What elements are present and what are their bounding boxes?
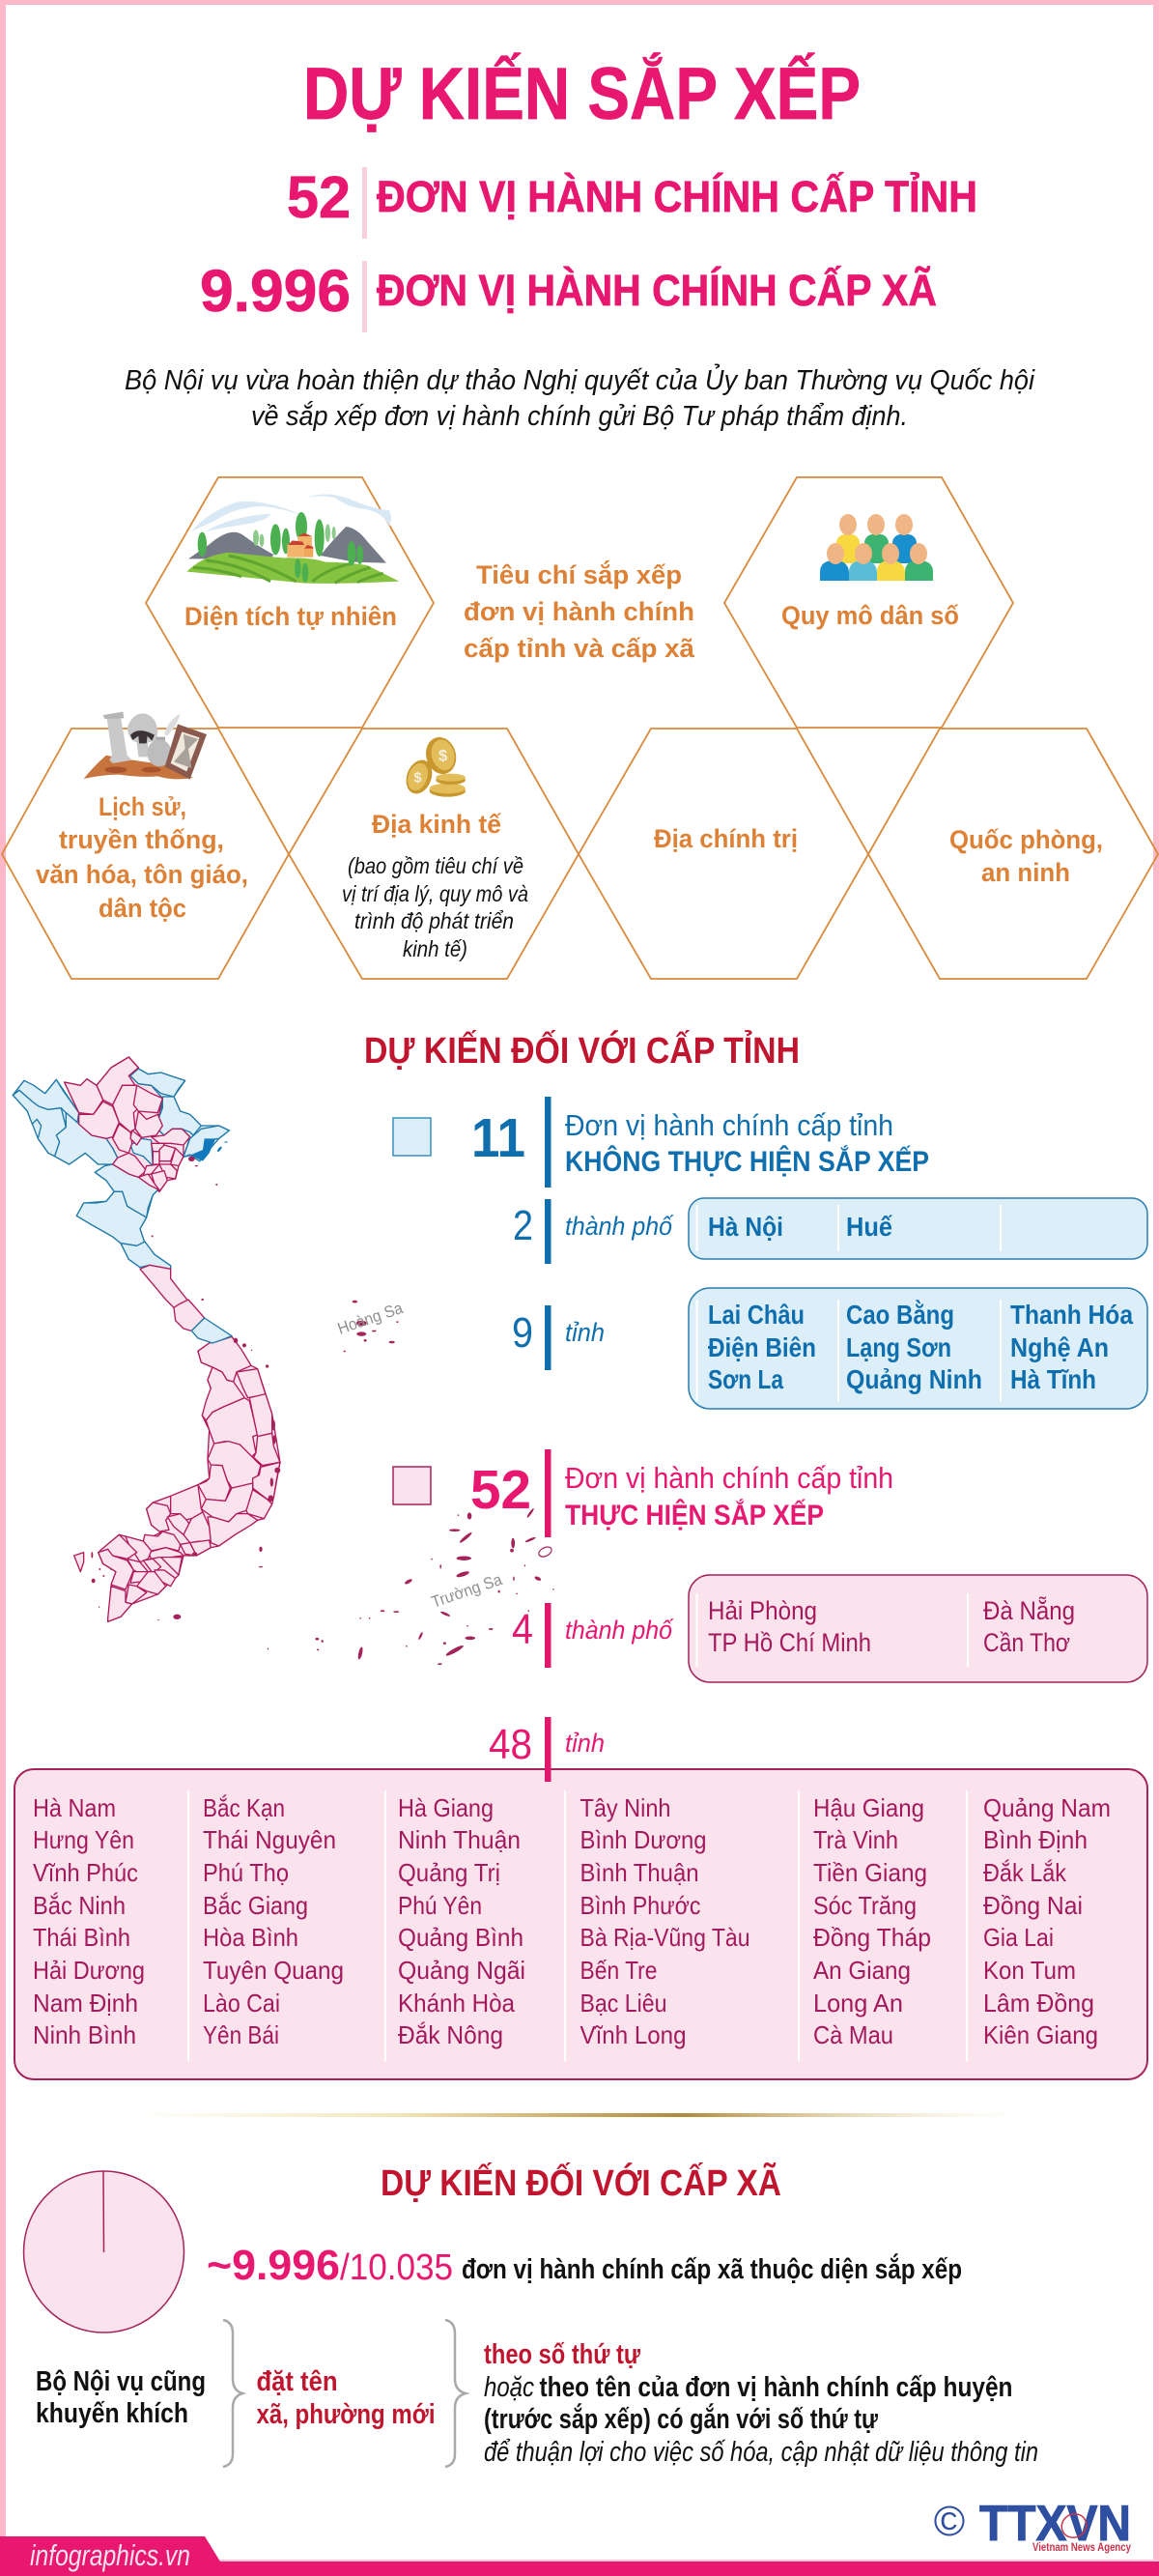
column 3: Hà Giang bbox=[398, 1793, 494, 1822]
column 2: Thái Nguyên bbox=[203, 1825, 336, 1854]
label: Trường Sa: Trường Sa bbox=[429, 1570, 505, 1612]
bracket 2 bbox=[445, 2320, 466, 2467]
column 5: Long An bbox=[813, 1989, 903, 2018]
note: geo-economics detail: vị trí địa lý, quy mô và bbox=[342, 881, 528, 906]
stat: 52 provinces rearranged: Đơn vị hành chính cấp tỉnh bbox=[565, 1461, 893, 1495]
column 6: Đồng Nai bbox=[983, 1891, 1083, 1920]
label: natural area: Diện tích tự nhiên bbox=[184, 602, 397, 631]
pie chart: 9.996 of 10.035 bbox=[23, 2171, 184, 2333]
column 3: Quảng Trị bbox=[398, 1858, 500, 1887]
headline stat: 52 provinces: 52 bbox=[287, 164, 351, 230]
column 2: Hòa Bình bbox=[203, 1923, 298, 1952]
stat: 52 provinces rearranged: THỰC HIỆN SẮP XẾP bbox=[565, 1499, 824, 1531]
islands: Trường Sa bbox=[268, 1507, 554, 1665]
note: geo-economics detail bbox=[342, 853, 528, 961]
map of Vietnam: south bbox=[74, 1299, 280, 1621]
column 2 bbox=[203, 1793, 344, 2049]
stat: 11 provinces not rearranged: 11 bbox=[471, 1107, 525, 1169]
label: defence and security: an ninh bbox=[981, 858, 1070, 887]
column 2: Yên Bái bbox=[203, 2020, 279, 2049]
column 6: Lâm Đồng bbox=[983, 1989, 1094, 2018]
islands: Hoàng Sa bbox=[344, 1301, 399, 1352]
panel: blue provinces bbox=[689, 1288, 1147, 1409]
column 3: Ninh Thuận bbox=[398, 1825, 521, 1854]
panel: blue provinces: Nghệ An bbox=[1010, 1332, 1109, 1362]
text: naming options: theo số thứ tự bbox=[484, 2339, 640, 2370]
column 5: Trà Vinh bbox=[813, 1825, 898, 1854]
stat: 52 provinces rearranged bbox=[470, 1449, 893, 1537]
label: geo-economics: Địa kinh tế bbox=[372, 810, 502, 839]
panel: blue provinces: Cao Bằng bbox=[846, 1300, 954, 1330]
panel: blue cities bbox=[689, 1198, 1147, 1259]
panel: pink cities: Hải Phòng bbox=[708, 1596, 817, 1625]
panel: blue provinces: Lai Châu bbox=[708, 1300, 805, 1330]
text: ministry encourages bbox=[36, 2366, 206, 2429]
column 1: Nam Định bbox=[33, 1989, 138, 2018]
stat: commune count: đơn vị hành chính cấp xã thuộc diện sắp xếp bbox=[462, 2252, 962, 2285]
footer bar bbox=[0, 2536, 1159, 2576]
column 2: Phú Thọ bbox=[203, 1858, 289, 1887]
column 2: Bắc Kạn bbox=[203, 1793, 285, 1822]
headline stat: 52 provinces: ĐƠN VỊ HÀNH CHÍNH CẤP TỈNH bbox=[377, 172, 977, 221]
column 6: Đắk Lắk bbox=[983, 1858, 1067, 1887]
stat: 9 provinces: 9 bbox=[512, 1309, 533, 1357]
stat: 52 provinces rearranged: 52 bbox=[470, 1459, 531, 1521]
center heading: criteria: đơn vị hành chính bbox=[464, 597, 694, 626]
intro text bbox=[125, 362, 1035, 432]
label: history and culture: Lịch sử, bbox=[99, 792, 186, 821]
note: geo-economics detail: kinh tế) bbox=[403, 936, 467, 961]
panel: blue cities: Huế bbox=[846, 1212, 892, 1242]
column 4: Vĩnh Long bbox=[580, 2020, 686, 2049]
text: name new communes: xã, phường mới bbox=[257, 2399, 435, 2430]
column 5: An Giang bbox=[813, 1956, 911, 1985]
icon: people bbox=[820, 514, 933, 581]
column 6 bbox=[983, 1793, 1111, 2049]
column 5: Hậu Giang bbox=[813, 1793, 924, 1822]
map of Vietnam: north bbox=[13, 1057, 229, 1307]
label: population size: Quy mô dân số bbox=[781, 601, 959, 630]
panel: blue provinces: Thanh Hóa bbox=[1010, 1300, 1133, 1330]
stat: 11 provinces not rearranged: KHÔNG THỰC HIỆN SẮP XẾP bbox=[565, 1145, 929, 1178]
text: ministry encourages: khuyến khích bbox=[36, 2398, 188, 2429]
panel: blue provinces: Hà Tĩnh bbox=[1010, 1364, 1096, 1394]
stat: 2 cities: 2 bbox=[513, 1202, 533, 1249]
column 6: Bình Định bbox=[983, 1825, 1088, 1854]
column 1: Thái Bình bbox=[33, 1923, 130, 1952]
column 5 bbox=[813, 1793, 931, 2049]
stat: commune count: /10.035 bbox=[340, 2247, 453, 2288]
column 3: Quảng Bình bbox=[398, 1923, 523, 1952]
section heading: commune level: DỰ KIẾN ĐỐI VỚI CẤP XÃ bbox=[381, 2161, 781, 2204]
logo: TTXVN: TTXVN bbox=[979, 2496, 1131, 2552]
logo: TTXVN: © bbox=[934, 2498, 965, 2545]
center heading: criteria: Tiêu chí sắp xếp bbox=[476, 559, 682, 589]
column 1: Hưng Yên bbox=[33, 1825, 134, 1854]
panel: blue cities: Hà Nội bbox=[708, 1212, 783, 1242]
column 3: Quảng Ngãi bbox=[398, 1956, 525, 1985]
text: naming options: theo tên của đơn vị hành chính cấp huyện bbox=[539, 2372, 1012, 2403]
column 1: Vĩnh Phúc bbox=[33, 1858, 138, 1887]
legend: blue square bbox=[393, 1118, 431, 1156]
stat: 48 provinces: 48 bbox=[489, 1721, 532, 1768]
text: name new communes bbox=[257, 2366, 435, 2430]
panel: pink cities: TP Hồ Chí Minh bbox=[708, 1628, 871, 1657]
title: DỰ KIẾN SẮP XẾP bbox=[303, 52, 861, 135]
legend: pink square bbox=[393, 1467, 431, 1504]
label: history and culture bbox=[36, 792, 248, 923]
center heading: criteria: cấp tỉnh và cấp xã bbox=[464, 634, 695, 663]
stat: 2 cities: thành phố bbox=[565, 1212, 674, 1241]
bracket 1 bbox=[223, 2320, 242, 2467]
stat: 9 provinces bbox=[512, 1305, 605, 1370]
icon: coins bbox=[402, 733, 466, 797]
column 4: Bình Phước bbox=[580, 1891, 701, 1920]
intro text: về sắp xếp đơn vị hành chính gửi Bộ Tư pháp thẩm định. bbox=[251, 400, 908, 432]
panel: pink cities: Cần Thơ bbox=[983, 1628, 1070, 1657]
panel: pink cities bbox=[689, 1575, 1147, 1682]
column 6: Kiên Giang bbox=[983, 2020, 1098, 2049]
icon: history artefacts bbox=[84, 712, 207, 780]
stat: 2 cities bbox=[513, 1199, 674, 1264]
logo: TTXVN: Vietnam News Agency bbox=[1032, 2540, 1131, 2554]
stat: 11 provinces not rearranged bbox=[471, 1097, 929, 1188]
text: naming options: (trước sắp xếp) có gắn với số thứ tự bbox=[484, 2402, 878, 2435]
column 1: Hà Nam bbox=[33, 1793, 116, 1822]
column 4: Bạc Liêu bbox=[580, 1989, 666, 2018]
panel: blue provinces: Sơn La bbox=[708, 1364, 783, 1394]
icon: landscape bbox=[186, 495, 399, 584]
stat: 11 provinces not rearranged: Đơn vị hành chính cấp tỉnh bbox=[565, 1108, 893, 1142]
note: geo-economics detail: trình độ phát triển bbox=[354, 908, 514, 933]
text: naming options: hoặc bbox=[484, 2372, 534, 2403]
column 2: Bắc Giang bbox=[203, 1891, 308, 1920]
stat: 4 cities: thành phố bbox=[565, 1616, 674, 1645]
column 3: Đắk Nông bbox=[398, 2020, 503, 2049]
label: Hoàng Sa: Hoàng Sa bbox=[335, 1299, 406, 1338]
column 2: Lào Cai bbox=[203, 1989, 280, 2018]
column 5: Sóc Trăng bbox=[813, 1891, 917, 1920]
headline stat: 9.996 communes: ĐƠN VỊ HÀNH CHÍNH CẤP XÃ bbox=[377, 266, 937, 315]
panel: blue provinces: Điện Biên bbox=[708, 1332, 816, 1362]
column 6: Gia Lai bbox=[983, 1923, 1054, 1952]
headline stat: 52 provinces bbox=[287, 164, 977, 239]
column 6: Kon Tum bbox=[983, 1956, 1076, 1985]
column 1: Hải Dương bbox=[33, 1956, 145, 1985]
text: name new communes: đặt tên bbox=[257, 2366, 338, 2397]
headline stat: 9.996 communes bbox=[200, 258, 937, 332]
center heading: criteria bbox=[464, 559, 695, 663]
label: defence and security: Quốc phòng, bbox=[949, 825, 1103, 854]
stat: commune count bbox=[207, 2242, 962, 2289]
column 6: Quảng Nam bbox=[983, 1793, 1111, 1822]
column 3 bbox=[398, 1793, 525, 2049]
stat: 48 provinces bbox=[489, 1717, 605, 1782]
column 4: Bình Dương bbox=[580, 1825, 707, 1854]
stat: 48 provinces: tỉnh bbox=[565, 1729, 605, 1758]
criteria hexagon grid bbox=[2, 477, 1158, 979]
column 3: Khánh Hòa bbox=[398, 1989, 515, 2018]
icon: coins: $ bbox=[438, 746, 448, 764]
panel: pink cities: Đà Nẵng bbox=[983, 1595, 1075, 1625]
column 1: Bắc Ninh bbox=[33, 1891, 126, 1920]
column 5: Cà Mau bbox=[813, 2020, 893, 2049]
column 4 bbox=[580, 1793, 749, 2049]
stat: 9 provinces: tỉnh bbox=[565, 1318, 605, 1347]
label: history and culture: truyền thống, bbox=[59, 825, 224, 854]
label: history and culture: văn hóa, tôn giáo, bbox=[36, 860, 248, 889]
column 1 bbox=[33, 1793, 145, 2049]
panel: 48 provinces list bbox=[14, 1769, 1147, 2079]
note: geo-economics detail: (bao gồm tiêu chí về bbox=[348, 853, 523, 878]
column 4: Bà Rịa-Vũng Tàu bbox=[580, 1923, 749, 1952]
column 1: Ninh Bình bbox=[33, 2020, 136, 2049]
headline stat: 9.996 communes: 9.996 bbox=[200, 258, 351, 324]
column 2: Tuyên Quang bbox=[203, 1956, 344, 1985]
column 4: Tây Ninh bbox=[580, 1793, 670, 1822]
stat: 4 cities: 4 bbox=[512, 1606, 533, 1653]
column 5: Tiền Giang bbox=[813, 1858, 927, 1887]
text: naming options: để thuận lợi cho việc số hóa, cập nhật dữ liệu thông tin bbox=[484, 2437, 1038, 2468]
stat: 4 cities bbox=[512, 1603, 674, 1668]
column 4: Bến Tre bbox=[580, 1956, 657, 1985]
label: defence and security bbox=[949, 825, 1103, 887]
logo: TTXVN bbox=[934, 2496, 1131, 2554]
stat: commune count: ~9.996 bbox=[207, 2242, 340, 2289]
column 3: Phú Yên bbox=[398, 1891, 482, 1920]
panel: blue provinces: Quảng Ninh bbox=[846, 1364, 982, 1394]
label: geopolitics: Địa chính trị bbox=[654, 824, 798, 853]
text: naming options bbox=[484, 2339, 1038, 2468]
icon: coins: $ bbox=[414, 770, 422, 786]
intro text: Bộ Nội vụ vừa hoàn thiện dự thảo Nghị quyết của Ủy ban Thường vụ Quốc hội bbox=[125, 362, 1035, 396]
footer bar: infographics.vn bbox=[30, 2538, 190, 2572]
column 4: Bình Thuận bbox=[580, 1858, 699, 1887]
section heading: province level: DỰ KIẾN ĐỐI VỚI CẤP TỈNH bbox=[364, 1028, 800, 1072]
column 5: Đồng Tháp bbox=[813, 1923, 931, 1952]
text: ministry encourages: Bộ Nội vụ cũng bbox=[36, 2366, 206, 2397]
label: history and culture: dân tộc bbox=[99, 894, 186, 923]
panel: blue provinces: Lạng Sơn bbox=[846, 1332, 951, 1362]
